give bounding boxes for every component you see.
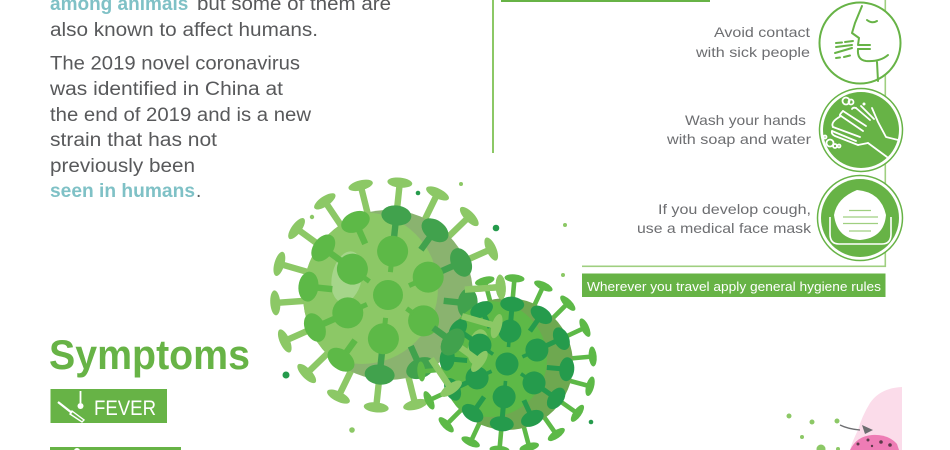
illustration: small coronavirus [416, 273, 598, 450]
text block: wash hands: with soap and water [666, 131, 811, 147]
symptom tag: fever [50, 389, 167, 423]
text block: avoid contact: Avoid contact [714, 24, 810, 40]
illustration: nose and mouth with droplets [786, 387, 902, 450]
icon: thermometers [58, 391, 84, 422]
text block: avoid contact: with sick people [695, 44, 810, 60]
text block: novel coronavirus paragraph: . [196, 181, 201, 202]
text block: wash hands: Wash your hands [685, 112, 806, 128]
text block: intro paragraph [50, 0, 391, 41]
icon: wash hands [820, 88, 902, 172]
heading: symptoms: Symptoms [49, 331, 250, 378]
symptom tag: fever: FEVER [94, 397, 156, 420]
text block: face mask advice: If you develop cough, [658, 201, 811, 217]
text block: novel coronavirus paragraph: strain that has not [50, 130, 218, 151]
text block: face mask advice: use a medical face mask [637, 220, 812, 236]
text block: novel coronavirus paragraph: previously been [50, 156, 195, 177]
text block: novel coronavirus paragraph: seen in humans [50, 181, 195, 202]
text block: intro paragraph: also known to affect humans. [50, 20, 318, 41]
banner: hygiene rules [582, 274, 886, 297]
text block: avoid contact [695, 24, 810, 60]
decorative virus particles [282, 182, 593, 433]
text block: wash hands [666, 112, 811, 147]
illustration: large virus spikes overlapping small virus [421, 274, 507, 400]
illustration: large coronavirus [269, 176, 507, 414]
icon: avoid contact face [820, 2, 900, 84]
text block: novel coronavirus paragraph: the end of 2019 and is a new [50, 105, 311, 126]
symptom tag: second symptom (cropped) [50, 447, 181, 450]
text block: novel coronavirus paragraph: was identified in China at [49, 79, 284, 100]
icon: face mask [818, 176, 902, 260]
text block: novel coronavirus paragraph [49, 54, 311, 202]
text block: face mask advice [637, 201, 812, 236]
text block: novel coronavirus paragraph: The 2019 novel coronavirus [50, 54, 300, 74]
banner: hygiene rules: Wherever you travel apply general hygiene rules [587, 280, 881, 294]
